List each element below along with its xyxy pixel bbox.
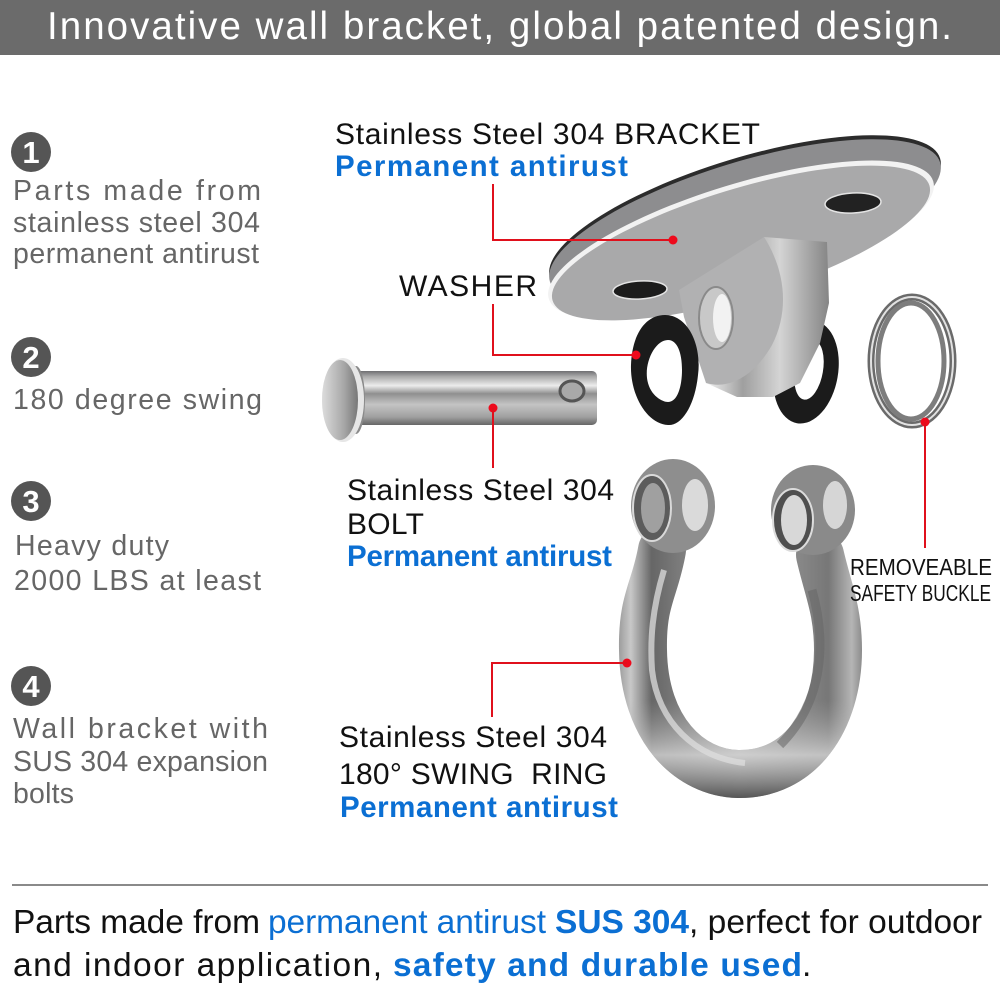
callout: swing ring: 180° SWING RING bbox=[339, 758, 607, 791]
callout: washer bbox=[399, 270, 640, 360]
footer text: Parts made from bbox=[13, 904, 260, 941]
callout: washer: WASHER bbox=[399, 270, 537, 303]
callout: bracket: Stainless Steel 304 BRACKET bbox=[335, 118, 760, 151]
mounting hole left bbox=[613, 280, 667, 300]
header title: Innovative wall bracket, global patented design. bbox=[47, 5, 952, 48]
callout: bolt bbox=[347, 404, 614, 573]
feature 4: SUS 304 expansion bbox=[13, 746, 268, 778]
shackle left eye bbox=[631, 459, 715, 553]
callout: bolt: BOLT bbox=[347, 508, 424, 541]
footer text: . bbox=[802, 947, 811, 984]
feature 4: 4 bbox=[22, 669, 40, 704]
product: swing ring shackle bbox=[631, 459, 855, 774]
feature 1 bbox=[11, 132, 261, 270]
mounting hole right bbox=[825, 192, 881, 214]
bolt cross hole bbox=[560, 381, 584, 401]
callout: bracket: Permanent antirust bbox=[335, 150, 628, 183]
bracket lug bore bbox=[699, 287, 733, 349]
bracket plate highlight bbox=[532, 128, 950, 352]
footer text bbox=[13, 904, 982, 984]
feature 2: 2 bbox=[22, 340, 40, 375]
feature 3 bbox=[11, 481, 261, 597]
shackle body bbox=[643, 550, 838, 774]
footer text: , perfect for outdoor bbox=[689, 904, 982, 941]
feature 1: Parts made from bbox=[13, 175, 261, 207]
feature 3: Heavy duty bbox=[15, 530, 170, 562]
shackle right eye bbox=[771, 465, 855, 555]
feature 3: 2000 LBS at least bbox=[14, 565, 261, 597]
product: front washer bbox=[631, 315, 699, 425]
product: clevis bolt bbox=[322, 358, 597, 442]
footer text: and indoor application, bbox=[13, 947, 382, 984]
feature 4: bolts bbox=[13, 778, 74, 810]
callout: bolt: Permanent antirust bbox=[347, 540, 612, 573]
callout: swing ring: Stainless Steel 304 bbox=[339, 721, 607, 754]
bracket plate face bbox=[537, 134, 945, 352]
product: split ring buckle bbox=[871, 297, 953, 425]
bracket lug side bbox=[706, 237, 829, 397]
callout: swing ring bbox=[339, 658, 632, 824]
footer text: permanent antirust bbox=[268, 904, 547, 941]
feature 1: permanent antirust bbox=[13, 238, 259, 270]
feature 2: 180 degree swing bbox=[13, 384, 262, 416]
callout: swing ring: Permanent antirust bbox=[340, 791, 618, 824]
bracket lug face bbox=[679, 237, 783, 385]
feature 3: 3 bbox=[22, 484, 40, 519]
product: wall bracket bbox=[532, 101, 958, 397]
footer text: safety and durable used bbox=[393, 947, 802, 984]
feature 1: 1 bbox=[22, 135, 40, 170]
header banner bbox=[0, 0, 1000, 55]
callout: safety buckle bbox=[850, 418, 992, 606]
callout: bolt: Stainless Steel 304 bbox=[347, 474, 614, 507]
feature list bbox=[11, 132, 268, 810]
callout: bracket bbox=[335, 118, 760, 244]
feature 1: stainless steel 304 bbox=[13, 207, 260, 239]
feature 2 bbox=[11, 337, 262, 416]
product: rear washer bbox=[765, 315, 847, 429]
feature 4: Wall bracket with bbox=[13, 713, 268, 745]
bracket plate back rim bbox=[532, 101, 958, 335]
footer text: SUS 304 bbox=[555, 904, 689, 941]
feature 4 bbox=[11, 666, 268, 810]
